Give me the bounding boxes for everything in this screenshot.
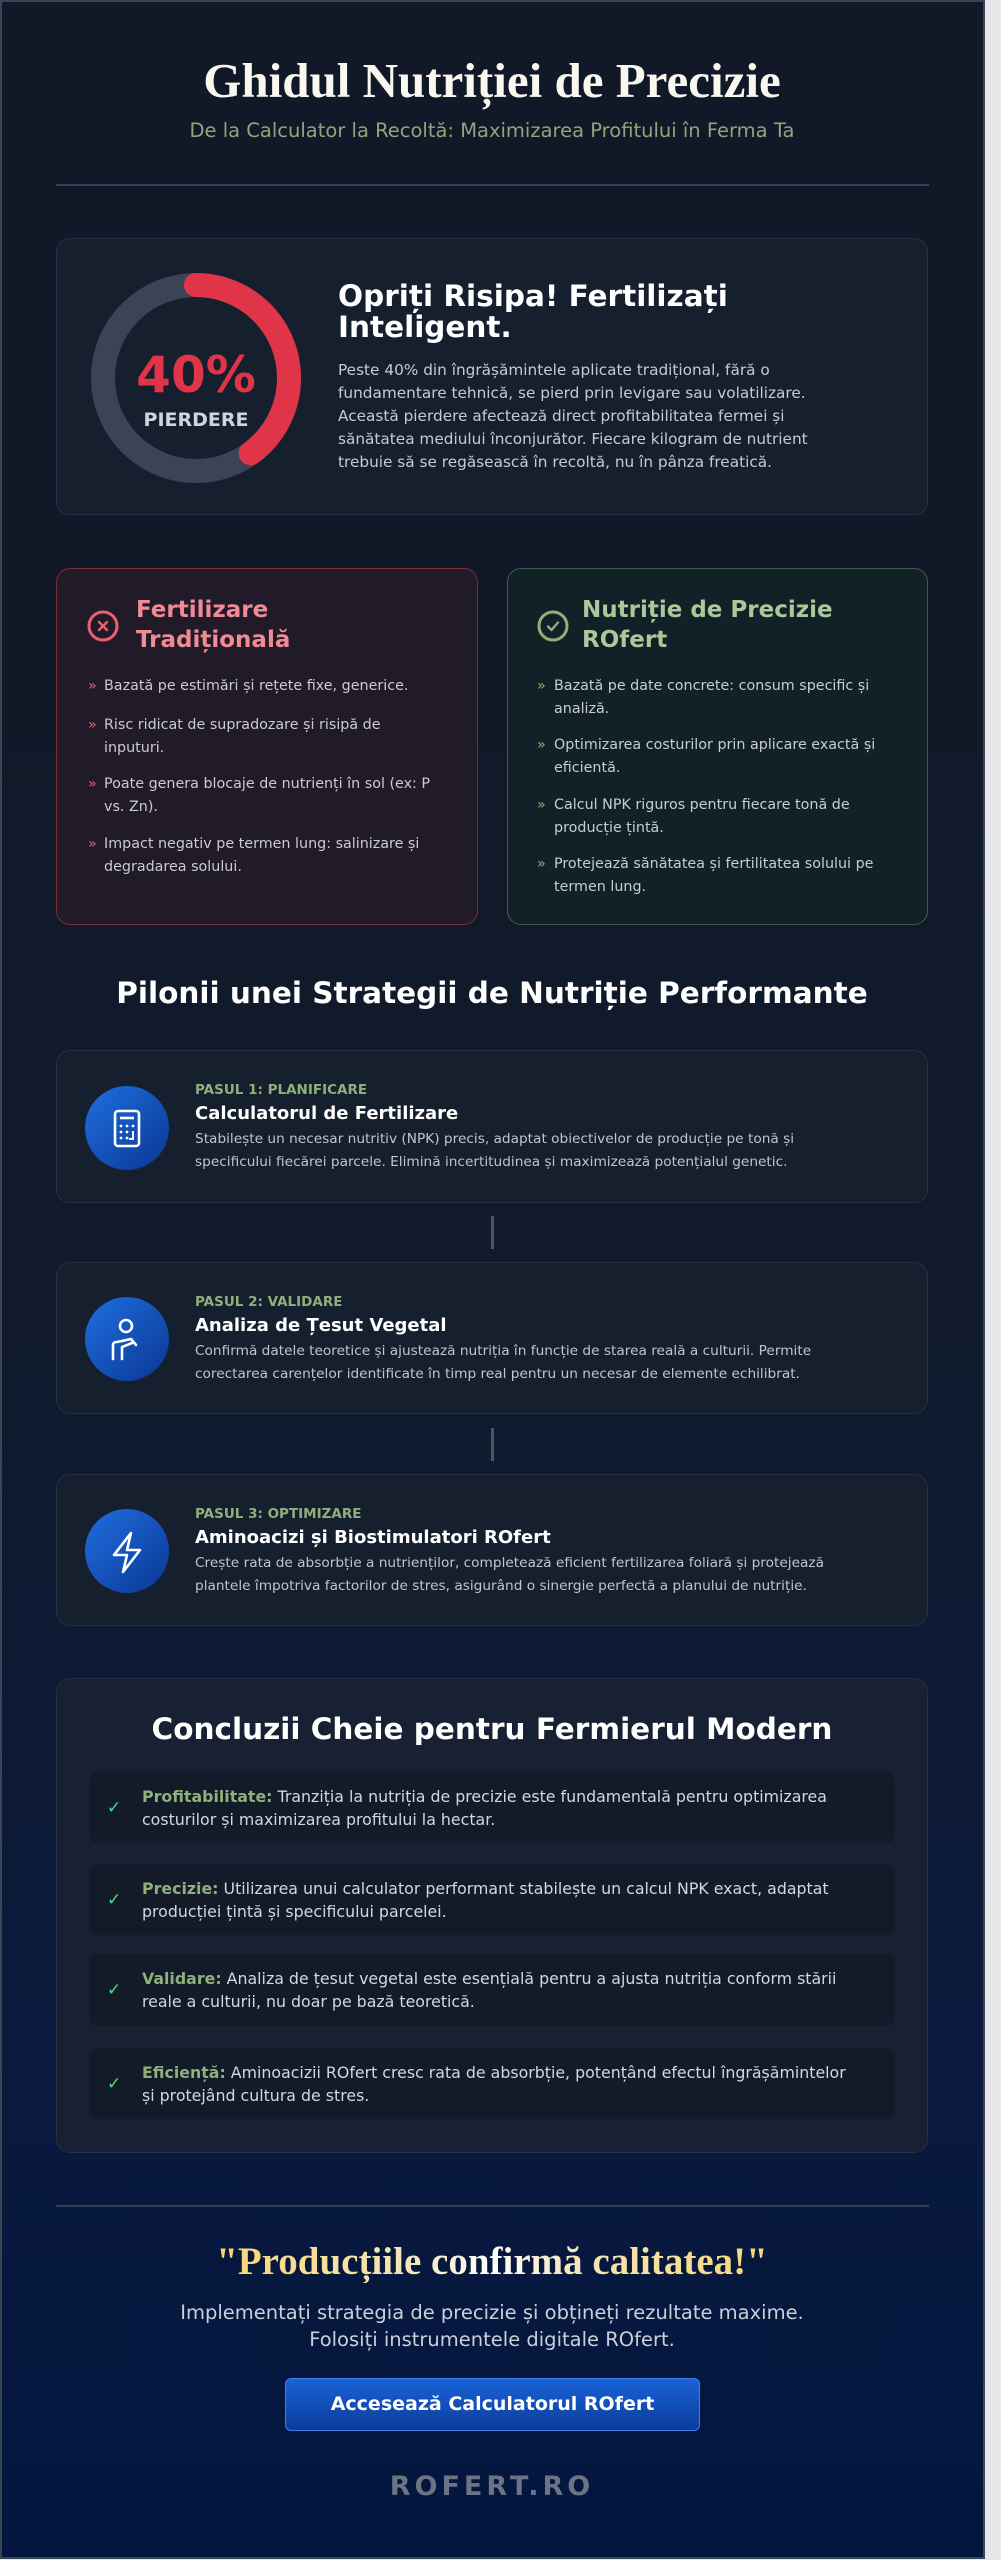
bullet list: Calcul NPK riguros pentru fiecare tonă de <box>554 797 850 813</box>
step card 1 <box>56 1050 928 1203</box>
section heading: pillars: Pilonii unei Strategii de Nutriție Performante <box>116 976 868 1010</box>
step card 2 <box>56 1262 928 1414</box>
bullet list: » <box>537 678 546 694</box>
heading: ROfert <box>582 627 667 653</box>
bullet list: Protejează sănătatea și fertilitatea solului pe <box>554 856 873 872</box>
hero heading: Inteligent. <box>338 310 512 344</box>
button: Accesează Calculatorul ROfert <box>331 2393 654 2415</box>
bullet list: Bazată pe date concrete: consum specific și <box>554 678 869 694</box>
conclusion items: producției țintă și specificului parcelei. <box>142 1902 447 1921</box>
step text: plantele împotriva factorilor de stres, asigurând o sinergie perfectă a planului de nutriție. <box>195 1578 807 1594</box>
bullet list: » <box>88 776 97 792</box>
conclusion items: costurilor și maximizarea profitului la hectar. <box>142 1810 495 1829</box>
hero paragraph <box>338 361 808 471</box>
hero heading <box>338 279 728 344</box>
icon: check circle <box>538 610 568 642</box>
conclusion items: ✓ <box>107 1980 121 2000</box>
hero paragraph: trebuie să se regăsească în recoltă, nu în pânza freatică. <box>338 453 772 471</box>
icon: calculator <box>85 1086 169 1170</box>
bullet list: termen lung. <box>554 879 646 895</box>
heading: Fertilizare <box>136 597 268 623</box>
bullet list: inputuri. <box>104 740 164 756</box>
donut chart 40% <box>91 273 301 483</box>
bullet list: » <box>537 737 546 753</box>
arrow: connector 1 <box>491 1216 494 1249</box>
conclusion items: ✓ <box>107 1798 121 1818</box>
hero paragraph: Peste 40% din îngrășămintele aplicate tradițional, fără o <box>338 361 770 379</box>
bullet list: Poate genera blocaje de nutrienți în sol (ex: P <box>104 776 430 792</box>
conclusions heading: Concluzii Cheie pentru Fermierul Modern <box>152 1712 832 1746</box>
bullet list: eficientă. <box>554 760 620 776</box>
bullet list: vs. Zn). <box>104 799 158 815</box>
bullet list: » <box>88 678 97 694</box>
step text <box>195 1082 794 1170</box>
bullet list: degradarea solului. <box>104 859 242 875</box>
step text <box>195 1294 811 1382</box>
bullet list: analiză. <box>554 701 609 717</box>
donut chart 40%: 40% <box>136 346 256 404</box>
call to action text: Implementați strategia de precizie și obțineți rezultate maxime. <box>180 2301 804 2324</box>
step text: Aminoacizi și Biostimulatori ROfert <box>195 1527 551 1548</box>
step text: Crește rata de absorbție a nutrienților, completează eficient fertilizarea foliară și protejează <box>195 1555 824 1571</box>
bullet list <box>537 678 875 895</box>
conclusion items: Validare: Analiza de țesut vegetal este esențială pentru a ajusta nutriția conform stării <box>142 1969 836 1988</box>
hero paragraph: sănătatea mediului înconjurător. Fiecare kilogram de nutrient <box>338 430 808 448</box>
step text: Stabilește un necesar nutritiv (NPK) precis, adaptat obiectivelor de producție pe tonă și <box>195 1131 794 1147</box>
conclusion items: Profitabilitate: Tranziția la nutriția de precizie este fundamentală pentru optimizarea <box>142 1787 827 1806</box>
call to action text <box>180 2301 804 2351</box>
panel: key conclusions <box>56 1678 928 2153</box>
panel: hero loss <box>56 238 928 515</box>
conclusion items: reale a culturii, nu doar pe bază teoretică. <box>142 1992 475 2011</box>
step text: PASUL 3: OPTIMIZARE <box>195 1506 362 1522</box>
bullet list: Optimizarea costurilor prin aplicare exactă și <box>554 737 875 753</box>
bullet list: Impact negativ pe termen lung: salinizare și <box>104 836 419 852</box>
call to action text: Folosiți instrumentele digitale ROfert. <box>309 2328 675 2351</box>
arrow: connector 2 <box>491 1428 494 1461</box>
bullet list: producție țintă. <box>554 820 664 836</box>
step text: Calculatorul de Fertilizare <box>195 1103 458 1124</box>
button <box>285 2378 700 2431</box>
panel: traditional fertilization <box>56 568 478 925</box>
step text: PASUL 1: PLANIFICARE <box>195 1082 367 1098</box>
hero heading: Opriți Risipa! Fertilizați <box>338 279 728 313</box>
subtitle: De la Calculator la Recoltă: Maximizarea Profitului în Ferma Ta <box>190 119 794 142</box>
footer brand: ROFERT.RO <box>390 2471 594 2502</box>
conclusion items <box>89 1772 895 2119</box>
conclusion items: Precizie: Utilizarea unui calculator performant stabilește un calcul NPK exact, adaptat <box>142 1879 829 1898</box>
title: Ghidul Nutriției de Precizie <box>203 53 781 108</box>
conclusion items: ✓ <box>107 2074 121 2094</box>
heading <box>136 597 290 653</box>
step text: specificului fiecărei parcele. Elimină incertitudinea și maximizează potențialul genetic. <box>195 1154 787 1170</box>
bullet list: » <box>537 797 546 813</box>
quote: "Producțiile confirmă calitatea!" <box>216 2240 768 2283</box>
icon: x circle <box>88 610 118 642</box>
bullet list: » <box>537 856 546 872</box>
conclusion items: și protejând cultura de stres. <box>142 2086 369 2105</box>
bullet list: Risc ridicat de supradozare și risipă de <box>104 717 381 733</box>
step text: PASUL 2: VALIDARE <box>195 1294 342 1310</box>
step card 3 <box>56 1474 928 1626</box>
heading <box>582 597 833 653</box>
step text: Analiza de Țesut Vegetal <box>195 1315 447 1336</box>
bullet list: » <box>88 836 97 852</box>
conclusion items: Eficiență: Aminoacizii ROfert cresc rata de absorbție, potențând efectul îngrășămintelor <box>142 2063 846 2082</box>
step text: corectarea carențelor identificate în timp real pentru un necesar de elemente echilibrat. <box>195 1366 800 1382</box>
hero paragraph: Această pierdere afectează direct profitabilitatea fermei și <box>338 407 785 425</box>
icon: lightning <box>85 1509 169 1593</box>
donut chart 40%: PIERDERE <box>144 409 248 431</box>
conclusion items: ✓ <box>107 1890 121 1910</box>
bullet list: Bazată pe estimări și rețete fixe, generice. <box>104 678 408 694</box>
icon: plant analysis <box>85 1297 169 1381</box>
step text: Confirmă datele teoretice și ajustează nutriția în funcție de starea reală a culturii. Permite <box>195 1343 811 1359</box>
bullet list <box>88 678 430 875</box>
heading: Nutriție de Precizie <box>582 597 833 623</box>
bullet list: » <box>88 717 97 733</box>
panel: precision nutrition <box>507 568 928 925</box>
hero paragraph: fundamentare tehnică, se pierd prin levigare sau volatilizare. <box>338 384 806 402</box>
step text <box>195 1506 824 1594</box>
heading: Tradițională <box>136 627 290 653</box>
